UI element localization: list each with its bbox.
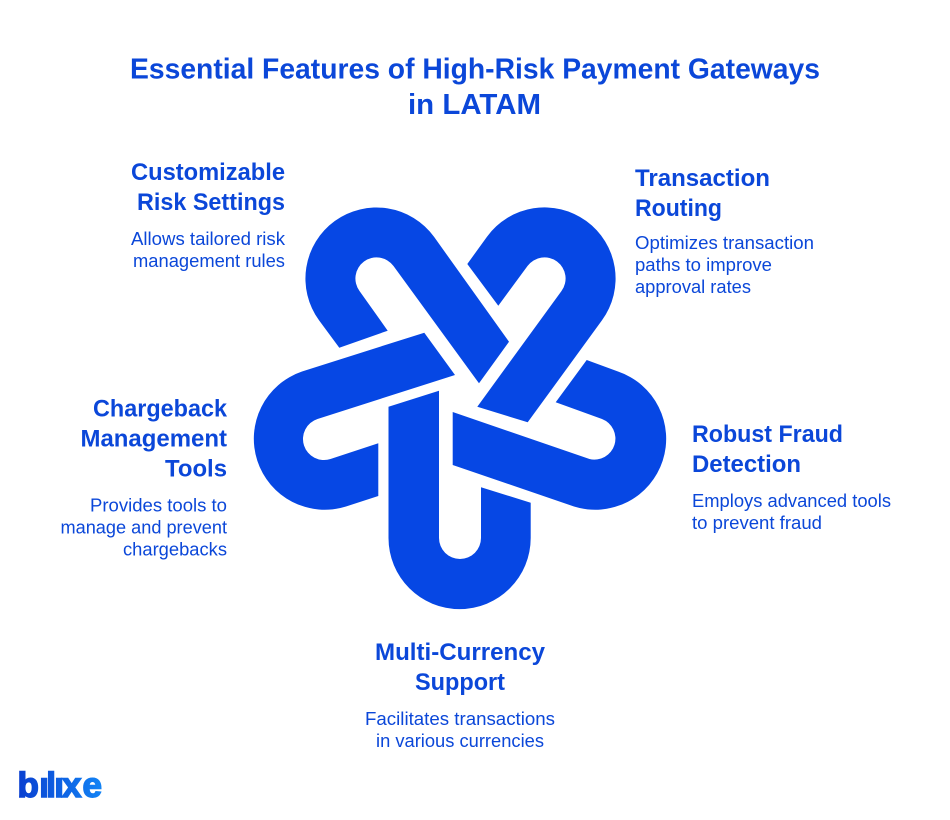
feature: Chargeback Management Tools: chargebacks bbox=[123, 540, 227, 560]
feature: Chargeback Management Tools: manage and prevent bbox=[60, 518, 227, 538]
logo: bilixe: bilixe bbox=[18, 766, 102, 805]
feature: Robust Fraud Detection: Employs advanced tools bbox=[692, 491, 891, 511]
feature: Transaction Routing bbox=[635, 165, 814, 297]
feature: Transaction Routing: paths to improve bbox=[635, 255, 772, 275]
feature: Transaction Routing: approval rates bbox=[635, 277, 751, 297]
feature: Robust Fraud Detection: Robust Fraud bbox=[692, 421, 843, 448]
feature: Chargeback Management Tools bbox=[60, 396, 228, 560]
feature: Multi-Currency Support: in various currencies bbox=[376, 731, 544, 751]
feature: Transaction Routing: Transaction bbox=[635, 165, 770, 192]
feature: Transaction Routing: Optimizes transaction bbox=[635, 233, 814, 253]
loop: right bbox=[453, 360, 666, 510]
feature: Customizable Risk Settings: Customizable bbox=[131, 159, 285, 186]
feature: Robust Fraud Detection bbox=[692, 421, 891, 533]
feature: Robust Fraud Detection: Detection bbox=[692, 451, 801, 478]
feature: Customizable Risk Settings: Allows tailored risk bbox=[131, 229, 286, 249]
feature: Transaction Routing: Routing bbox=[635, 195, 722, 222]
feature: Multi-Currency Support bbox=[365, 639, 555, 751]
feature: Chargeback Management Tools: Provides tools to bbox=[90, 496, 227, 516]
feature: Chargeback Management Tools: Chargeback bbox=[93, 396, 228, 423]
title bbox=[130, 54, 820, 121]
feature: Multi-Currency Support: Multi-Currency bbox=[375, 639, 546, 666]
feature: Chargeback Management Tools: Tools bbox=[165, 456, 227, 483]
feature: Customizable Risk Settings: Risk Settings bbox=[137, 189, 285, 216]
loop: top left bbox=[305, 207, 509, 383]
feature: Robust Fraud Detection: to prevent fraud bbox=[692, 513, 822, 533]
feature: Customizable Risk Settings bbox=[131, 159, 286, 271]
feature: Chargeback Management Tools: Management bbox=[80, 426, 227, 453]
feature: Customizable Risk Settings: management rules bbox=[133, 251, 285, 271]
loop: left bbox=[254, 333, 455, 510]
interlocking five-loop knot bbox=[254, 207, 666, 609]
title: in LATAM bbox=[408, 89, 541, 121]
loop: bottom bbox=[388, 391, 531, 609]
feature: Multi-Currency Support: Facilitates transactions bbox=[365, 709, 555, 729]
title: Essential Features of High-Risk Payment Gateways bbox=[130, 54, 820, 86]
loop: top right bbox=[467, 207, 616, 422]
feature: Multi-Currency Support: Support bbox=[415, 669, 505, 696]
